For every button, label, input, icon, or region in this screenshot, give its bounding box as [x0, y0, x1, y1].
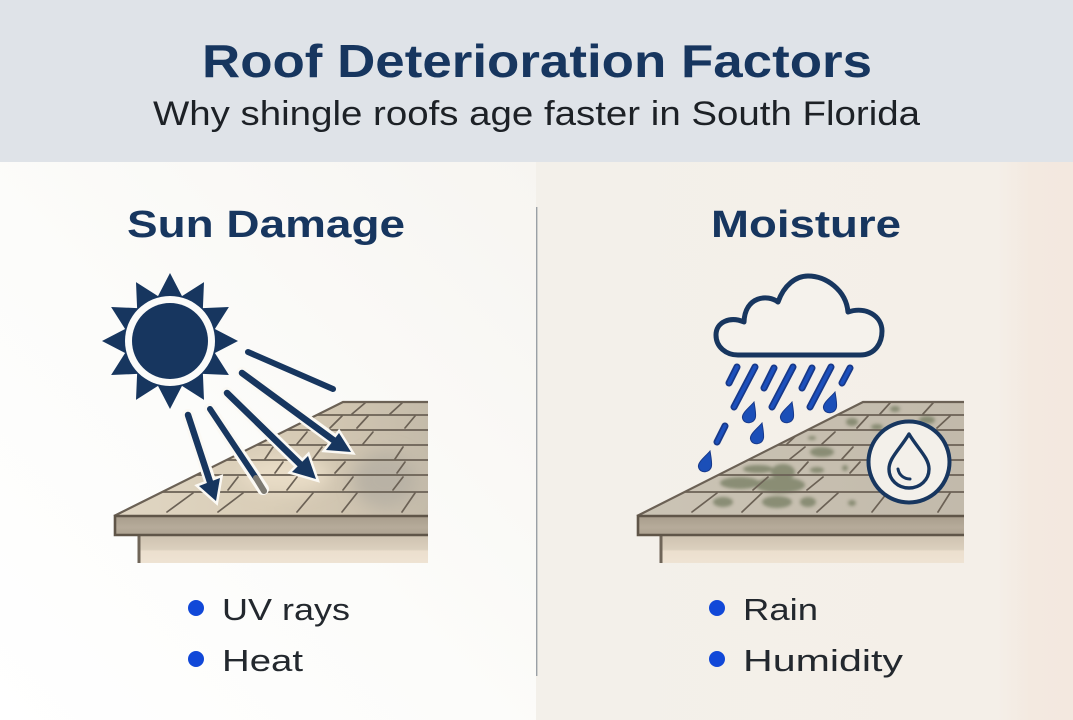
bullet	[709, 600, 725, 616]
illustration: sunlit shingle roof	[100, 402, 428, 563]
moss stains	[713, 406, 935, 508]
header band	[0, 0, 1073, 162]
arrows: sun rays	[188, 352, 351, 501]
label: Heat: Heat	[222, 643, 303, 678]
list: sun damage factors	[188, 592, 350, 678]
bullet	[188, 600, 204, 616]
icon: water drop badge	[868, 422, 950, 502]
panel: moisture background	[536, 162, 1073, 720]
rain drops	[698, 392, 837, 472]
icon: sun	[102, 273, 238, 409]
ray fading into roof	[210, 409, 264, 491]
bullet	[709, 651, 725, 667]
label: Rain: Rain	[743, 592, 818, 627]
bullet	[188, 651, 204, 667]
ray arrow to lower roof	[188, 415, 220, 501]
rain streaks	[717, 367, 850, 442]
icon: rain streaks and drops	[698, 367, 850, 472]
heading: moisture: Moisture	[711, 204, 901, 246]
illustration: mossy wet shingle roof	[620, 402, 964, 563]
icon: cloud	[716, 276, 882, 355]
label: UV rays: UV rays	[222, 592, 350, 627]
ray without arrowhead, upper	[248, 352, 333, 389]
ray arrow to upper roof	[242, 373, 351, 452]
label: Humidity: Humidity	[743, 643, 904, 678]
panel: sun damage background	[0, 162, 536, 720]
center divider	[536, 207, 537, 676]
list: moisture factors	[709, 592, 904, 678]
title: Roof Deterioration Factors	[202, 35, 872, 87]
ray arrow to middle roof	[227, 393, 316, 479]
heading: sun damage: Sun Damage	[127, 204, 405, 246]
subtitle: Why shingle roofs age faster in South Florida	[153, 95, 920, 133]
